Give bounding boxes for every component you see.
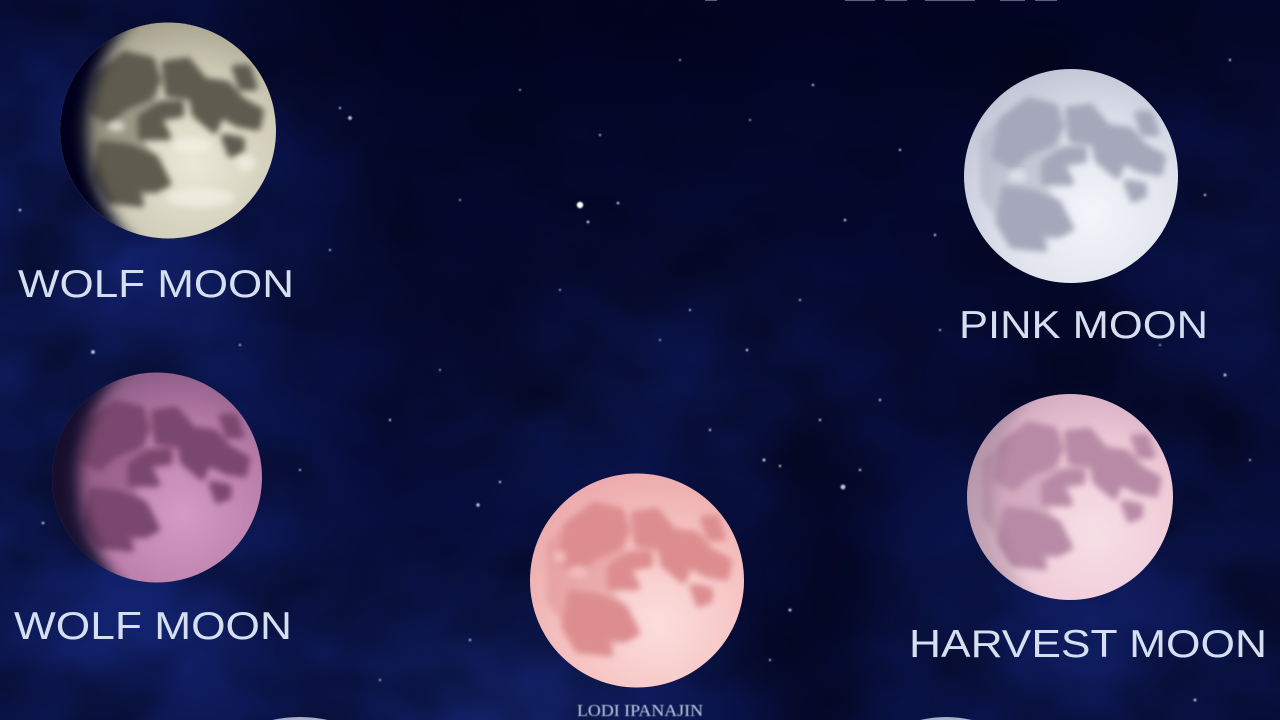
moon: wolf moon (top left) [60, 22, 276, 238]
moon: wolf moon (magenta, left) [52, 372, 262, 582]
top edge text fragments [705, 0, 1057, 1]
moon: pink moon (silver, top right) [964, 69, 1178, 283]
label: harvest moon: HARVEST MOON [909, 623, 1267, 666]
moon: harvest moon [967, 394, 1173, 600]
label: pink moon: PINK MOON [959, 304, 1208, 347]
cropped moon tops at bottom edge [272, 717, 972, 720]
label: wolf moon second: WOLF MOON [14, 605, 292, 648]
label: wolf moon: WOLF MOON [18, 263, 294, 306]
moon: salmon moon (bottom centre) [530, 474, 744, 688]
label: garbled small caption: LODI IPANAJIN [577, 701, 703, 720]
